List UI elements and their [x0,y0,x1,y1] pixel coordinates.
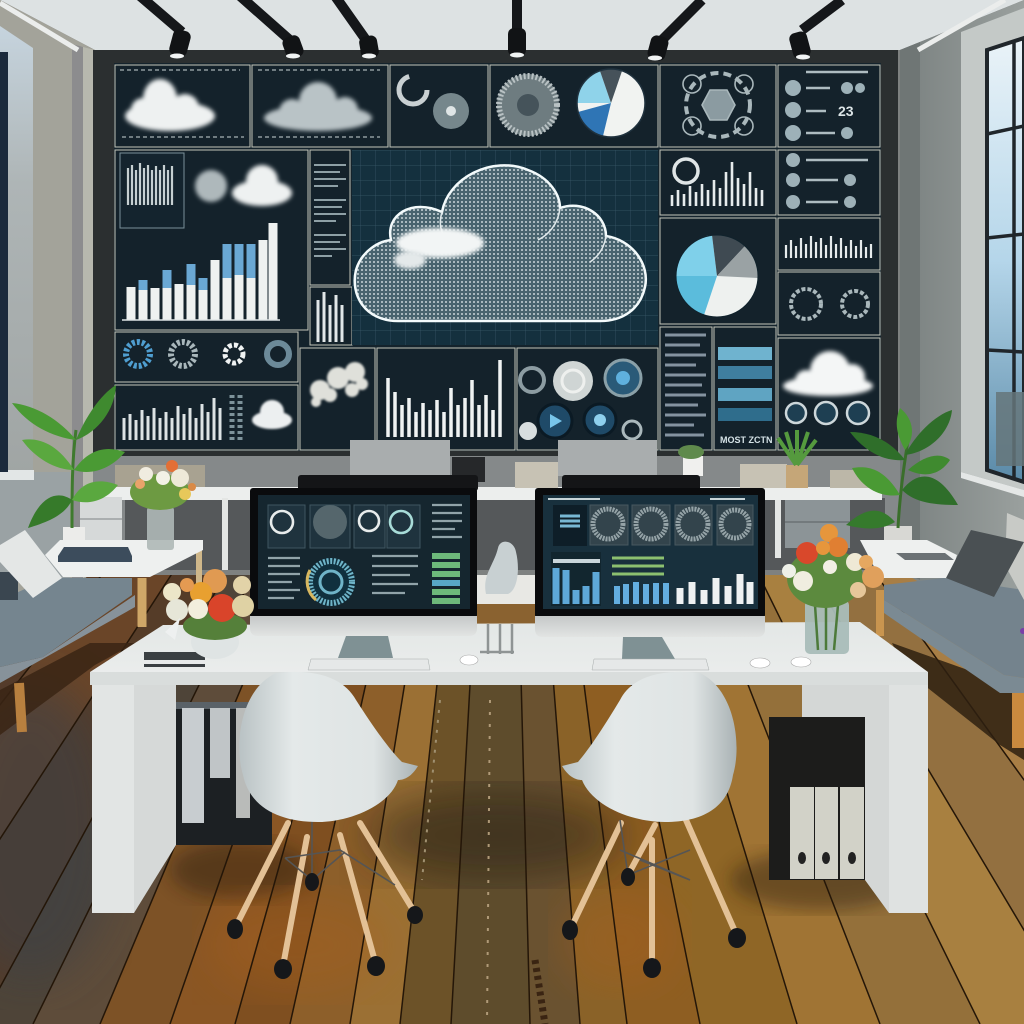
lines panel [665,335,706,435]
center bar chart [388,360,500,437]
main desk [90,622,928,913]
bars right [786,236,871,258]
small potted plants [678,430,816,488]
pillows [1005,513,1024,600]
desk bouquet right [782,524,884,654]
right monitor [535,488,765,659]
right wall [900,0,1024,650]
pie chart top [577,69,645,137]
monitor backs strip [298,475,700,491]
screen [258,495,470,609]
left plant [12,385,125,544]
right window [961,8,1024,497]
large bar chart [122,223,280,320]
icon list top right [785,72,868,141]
gauges top row [399,74,559,136]
top clouds [120,70,380,137]
blue status list [718,347,772,445]
screen [543,495,758,609]
desk bouquet left [144,569,254,667]
panel borders [115,65,880,450]
lower wall [0,472,70,582]
small chart card [120,153,184,228]
hexagon diagram [683,73,753,137]
pillow [0,530,62,598]
left desk binders [176,702,272,845]
central cloud [352,150,658,345]
wooden floor [0,575,1024,1024]
small clouds [195,165,292,206]
left chair [227,672,423,979]
icon list top right: 23 [838,103,854,119]
books [58,547,132,562]
text list panel [314,165,346,256]
dials right [791,289,868,319]
right desk binders [769,717,865,880]
pie chart main [676,235,758,317]
binders and shelves [115,462,875,488]
back wall [93,50,900,575]
left side table [45,540,203,627]
ceiling track lights [140,0,842,62]
dial cluster [519,360,641,440]
left wall [0,0,95,650]
seat shell [562,672,737,822]
right sofa [884,513,1024,748]
gear row [126,342,289,366]
dashboard wall [93,50,898,456]
back monitors [350,440,657,482]
seat shell [239,672,418,822]
right chair [562,672,746,978]
left sofa [0,530,135,732]
left monitor [250,488,477,658]
scatter cloud [310,362,368,407]
cloud card [783,351,873,424]
ceiling [0,0,1024,50]
window reveal [0,26,33,475]
bird figurine [477,542,535,624]
back bouquet [130,460,196,550]
right plant [846,408,958,541]
chart with dial [672,159,762,206]
small bars panel [318,292,342,342]
lower cloud [252,400,292,429]
label: MOST ZCTN [720,435,772,445]
lower bars panel [124,395,240,440]
icon list right [786,153,868,209]
left window [0,52,8,472]
back wall lower shadow [93,456,900,570]
back desk row [80,487,885,570]
right side table [860,540,957,636]
keyboards and mice [308,624,811,670]
